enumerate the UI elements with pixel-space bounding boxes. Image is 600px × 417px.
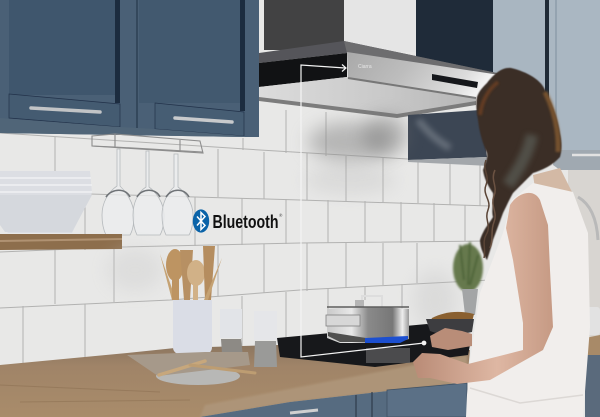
induction cooktop	[277, 324, 470, 367]
upper left cabinets	[0, 0, 259, 137]
cabinet handle left	[31, 108, 100, 112]
woman	[413, 68, 590, 417]
icon: Bluetooth rune	[193, 209, 209, 233]
dress	[466, 183, 590, 417]
hood chimney	[264, 0, 493, 72]
right wall and faucet	[568, 168, 600, 338]
wooden utensils	[160, 246, 222, 300]
spoon shadow	[107, 248, 163, 292]
control display	[432, 74, 478, 88]
range hood	[259, 0, 500, 166]
lower cabinets	[200, 355, 600, 417]
wine glasses	[102, 149, 193, 235]
bowl of food	[426, 312, 474, 335]
salt and pepper grinders	[220, 309, 277, 367]
Bluetooth logo and label: ®	[279, 212, 283, 218]
countertop	[0, 335, 600, 417]
near arm	[413, 193, 553, 384]
cabinet handle right	[175, 118, 232, 122]
blue flame	[365, 336, 408, 343]
callout line connecting touch control to hood	[301, 64, 426, 357]
Bluetooth wordmark: Bluetooth	[212, 212, 278, 232]
hood underside	[259, 77, 476, 117]
upper right cabinets	[492, 0, 600, 170]
wooden shelf	[0, 234, 122, 250]
neck	[533, 168, 572, 192]
range hood: Ciarra	[358, 64, 372, 70]
stacked plates	[0, 171, 92, 233]
hood steel front panel	[347, 52, 500, 98]
plate and wooden spoons	[127, 352, 255, 385]
plant	[453, 242, 483, 315]
Bluetooth logo and label	[193, 209, 283, 233]
far hand	[430, 328, 472, 350]
glass rack	[92, 134, 203, 153]
white cup	[173, 300, 212, 355]
hood back panel	[408, 110, 487, 160]
steam	[304, 115, 457, 330]
hair	[476, 68, 562, 260]
steel pot	[326, 296, 409, 343]
utensil holder	[160, 246, 222, 355]
